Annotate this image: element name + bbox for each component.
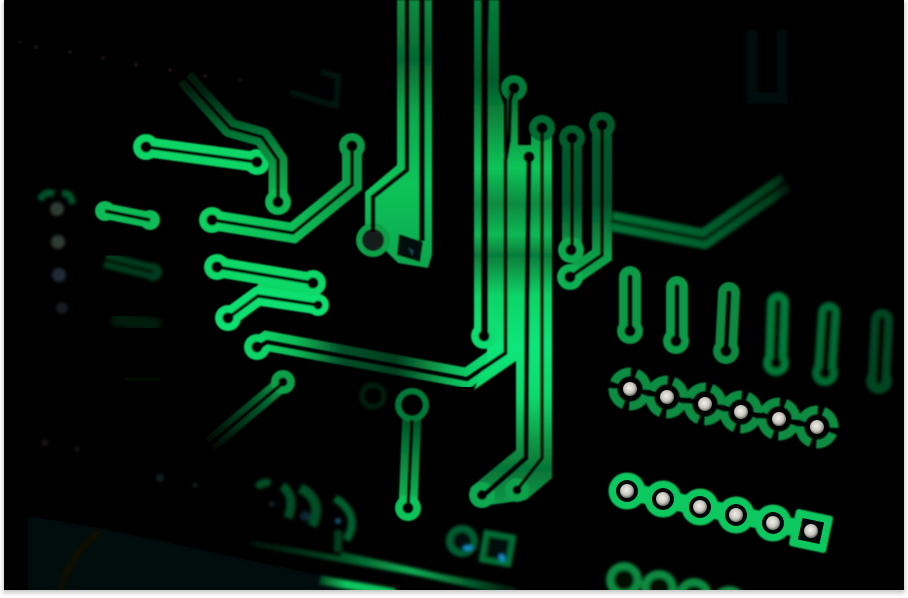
bottom traces [250,543,520,595]
dim pad top centre left [290,72,338,106]
thermal pin row [610,369,837,447]
specks lower left [41,439,198,488]
trace running to upper right [611,182,786,239]
trace B [185,78,291,215]
trace A [133,134,270,175]
dim substrate at bottom left [28,516,350,590]
dim specks along top left [18,40,242,82]
faint trace left lower [125,378,160,380]
trace C [199,133,365,233]
left header pins [40,193,72,314]
dim pad top right [752,30,782,98]
dim pad cluster centre [362,385,384,407]
small trace left bright [95,201,160,230]
small trace left dim [105,260,162,281]
small pads bottom centre [446,525,517,568]
slots row, out of focus [763,303,892,394]
ring pad and vertical trace [395,391,426,521]
main vertical bus [257,0,555,508]
T traces [204,254,329,331]
right trace pair [557,112,615,290]
dim ring pads bottom [258,483,352,552]
bright pin row with square pad [608,472,834,554]
faint trace left [112,318,160,326]
fading diagonal trace [208,370,295,446]
slots row [617,277,739,364]
long diagonal trace feeding main bus [244,334,504,378]
bottom pad row, clipped by edge [604,560,744,590]
power plane and vertical traces [356,0,432,268]
